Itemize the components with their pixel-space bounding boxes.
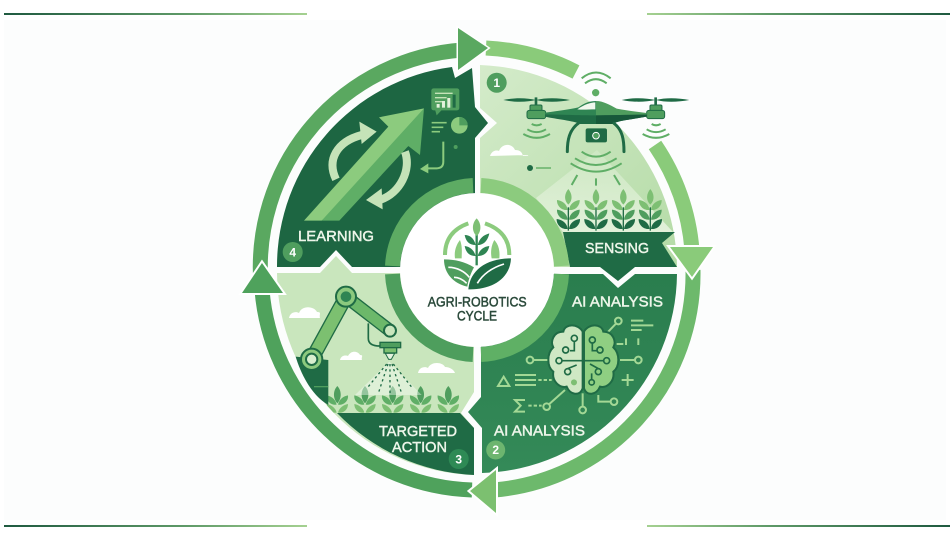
arrow: into targeted action (470, 470, 496, 513)
heading: targeted action (379, 423, 457, 456)
panel: targeted action (277, 256, 474, 475)
icon: plants row (327, 386, 459, 413)
top left rule (4, 13, 307, 15)
step number 2: 2 (492, 443, 499, 457)
center hub disc (400, 193, 554, 347)
icon: brain (548, 325, 618, 394)
center title (428, 294, 527, 324)
heading: targeted action: ACTION (392, 439, 447, 456)
heading: ai analysis upper: AI ANALYSIS (572, 294, 663, 310)
step number 2 (486, 440, 505, 460)
icon: clouds (289, 307, 455, 373)
panel: ai analysis (468, 274, 677, 473)
bottom left rule (4, 525, 307, 527)
icon: robot arm sprayer (296, 287, 422, 405)
heading: ai analysis lower: AI ANALYSIS (494, 422, 585, 440)
drone beam cone (536, 150, 673, 232)
icon: drone (503, 72, 689, 186)
icon: rising arrow (304, 108, 424, 221)
heading: learning: LEARNING (298, 228, 374, 245)
icon: circuit nodes and formula marks (498, 318, 653, 413)
arrow: into learning (242, 263, 283, 293)
arrow: into ai analysis (670, 247, 713, 277)
center title: CYCLE (457, 308, 497, 324)
icon: report chart (431, 88, 459, 115)
center logo (444, 218, 511, 289)
step number 3: 3 (455, 452, 462, 466)
center hub ring (392, 186, 562, 354)
icon: return arrow (420, 142, 458, 173)
icon: plants row (557, 189, 662, 231)
targeted action banner (337, 413, 474, 475)
icon: pie and notes (432, 117, 468, 134)
bottom right rule (647, 525, 950, 527)
step number 1: 1 (493, 76, 500, 90)
cycle arrow bands (260, 48, 693, 490)
step number 4 (283, 242, 303, 262)
heading: sensing: SENSING (585, 240, 649, 257)
center title: AGRI-ROBOTICS (428, 294, 527, 310)
marker dot and dash (527, 165, 551, 171)
panel: learning (277, 67, 488, 267)
step number 3 (449, 449, 469, 469)
icon: loop arrows (333, 122, 407, 209)
heading: targeted action: TARGETED (379, 423, 457, 440)
top right rule (647, 13, 950, 15)
icon: cloud (490, 145, 528, 156)
step number 1 (487, 73, 507, 93)
arrow: into sensing (458, 28, 488, 70)
step number 4: 4 (289, 245, 296, 259)
sensing banner (563, 232, 677, 281)
panel: sensing (480, 65, 677, 281)
